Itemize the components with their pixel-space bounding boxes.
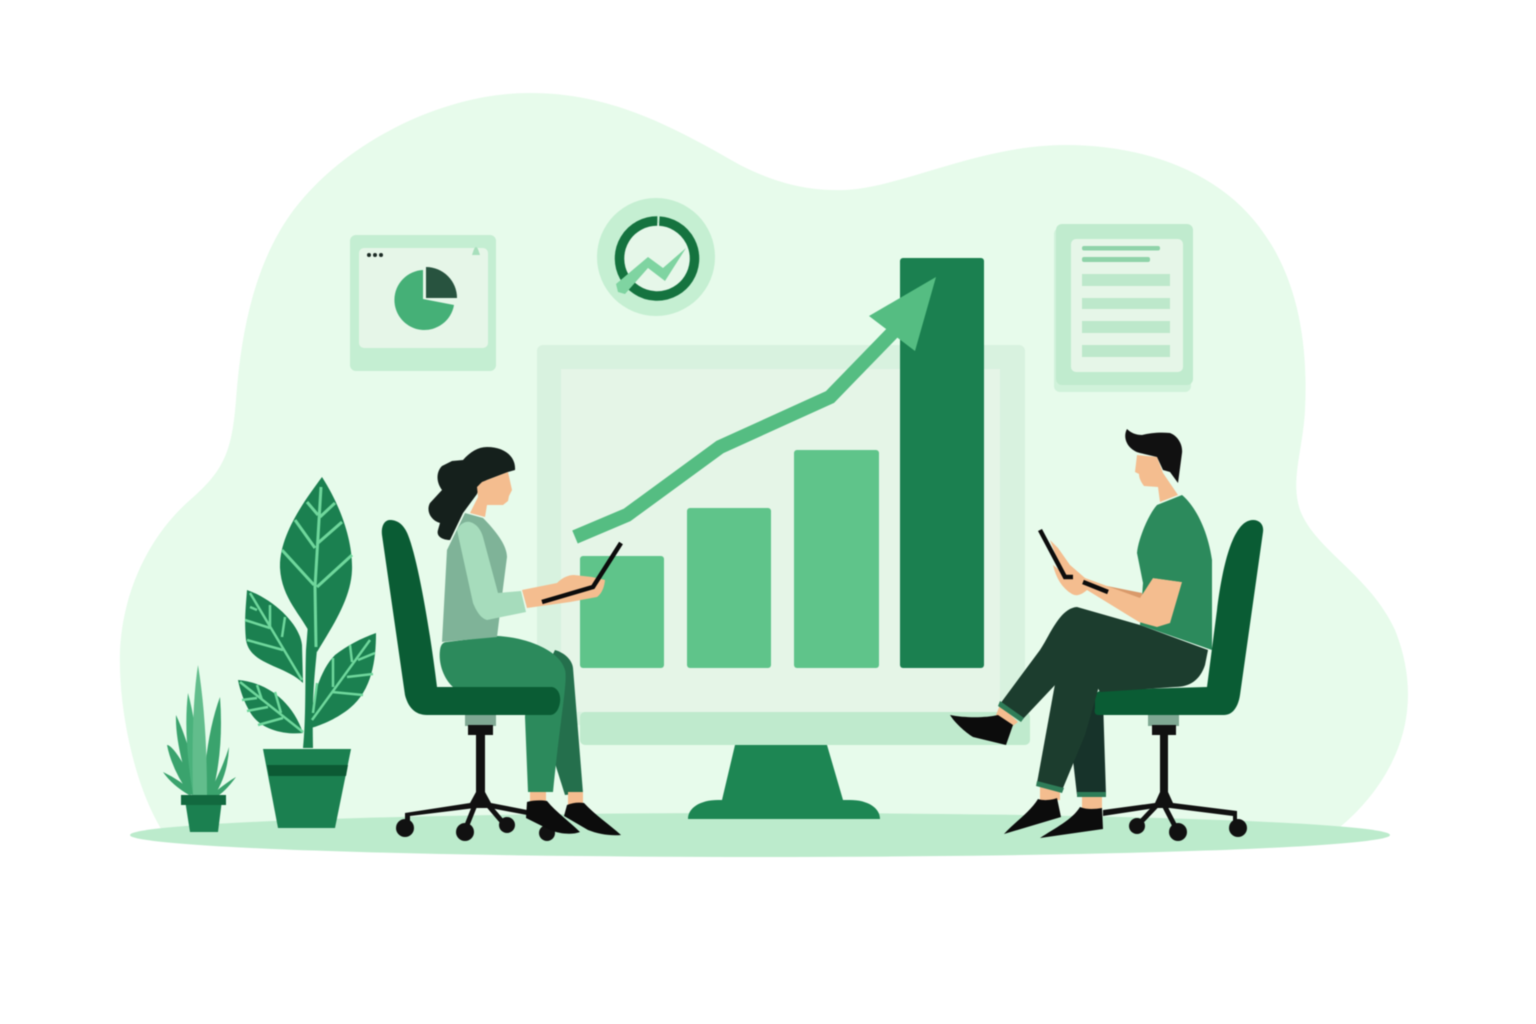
pie chart card xyxy=(350,235,496,371)
document card xyxy=(1054,224,1193,392)
arm and hand xyxy=(1050,540,1182,627)
large pot xyxy=(263,749,351,828)
hair xyxy=(1125,429,1182,483)
small potted plant xyxy=(163,665,236,832)
upper leg and hips xyxy=(1000,607,1208,720)
top leaf xyxy=(280,477,352,652)
monitor frame xyxy=(537,345,1025,725)
face and neck xyxy=(1135,455,1178,502)
tablet xyxy=(1040,530,1108,592)
chair base xyxy=(396,715,555,841)
chair base xyxy=(1103,715,1247,841)
torso xyxy=(442,513,507,642)
monitor with chart xyxy=(537,258,1030,819)
bar chart xyxy=(580,258,984,668)
ankles xyxy=(996,705,1102,810)
woman on chair xyxy=(382,447,621,841)
monitor screen xyxy=(561,369,1000,712)
shoes xyxy=(1004,798,1103,838)
shirt xyxy=(1137,495,1212,650)
sleeve xyxy=(1143,530,1182,590)
stem xyxy=(303,585,318,748)
sleeve xyxy=(457,522,526,620)
monitor stand xyxy=(688,745,880,819)
right leaf xyxy=(311,633,376,728)
blades xyxy=(163,665,236,797)
hand and forearm xyxy=(522,575,605,608)
cuffs xyxy=(998,701,1106,797)
face and neck xyxy=(470,472,512,517)
front leg and hips xyxy=(440,636,566,792)
background blob xyxy=(120,93,1408,835)
front lower leg xyxy=(1037,655,1098,788)
chair back and seat xyxy=(1095,520,1263,715)
laptop xyxy=(542,543,621,602)
man on chair xyxy=(950,429,1263,841)
floor xyxy=(130,813,1390,857)
lower left leaf xyxy=(238,680,303,733)
growth arrow xyxy=(575,277,936,537)
back leg xyxy=(540,650,583,795)
small pot xyxy=(185,800,222,832)
rear forearm xyxy=(1107,586,1142,600)
hair xyxy=(428,447,515,540)
ankles xyxy=(530,790,583,805)
shoes xyxy=(526,800,621,835)
upper left leaf xyxy=(245,590,303,683)
monitor bottom bezel xyxy=(580,712,1030,745)
large potted plant xyxy=(238,477,376,828)
rear lower leg xyxy=(1073,700,1106,795)
crossed foot xyxy=(950,715,1013,745)
gauge icon xyxy=(597,198,715,316)
chair seat and back xyxy=(382,520,560,715)
